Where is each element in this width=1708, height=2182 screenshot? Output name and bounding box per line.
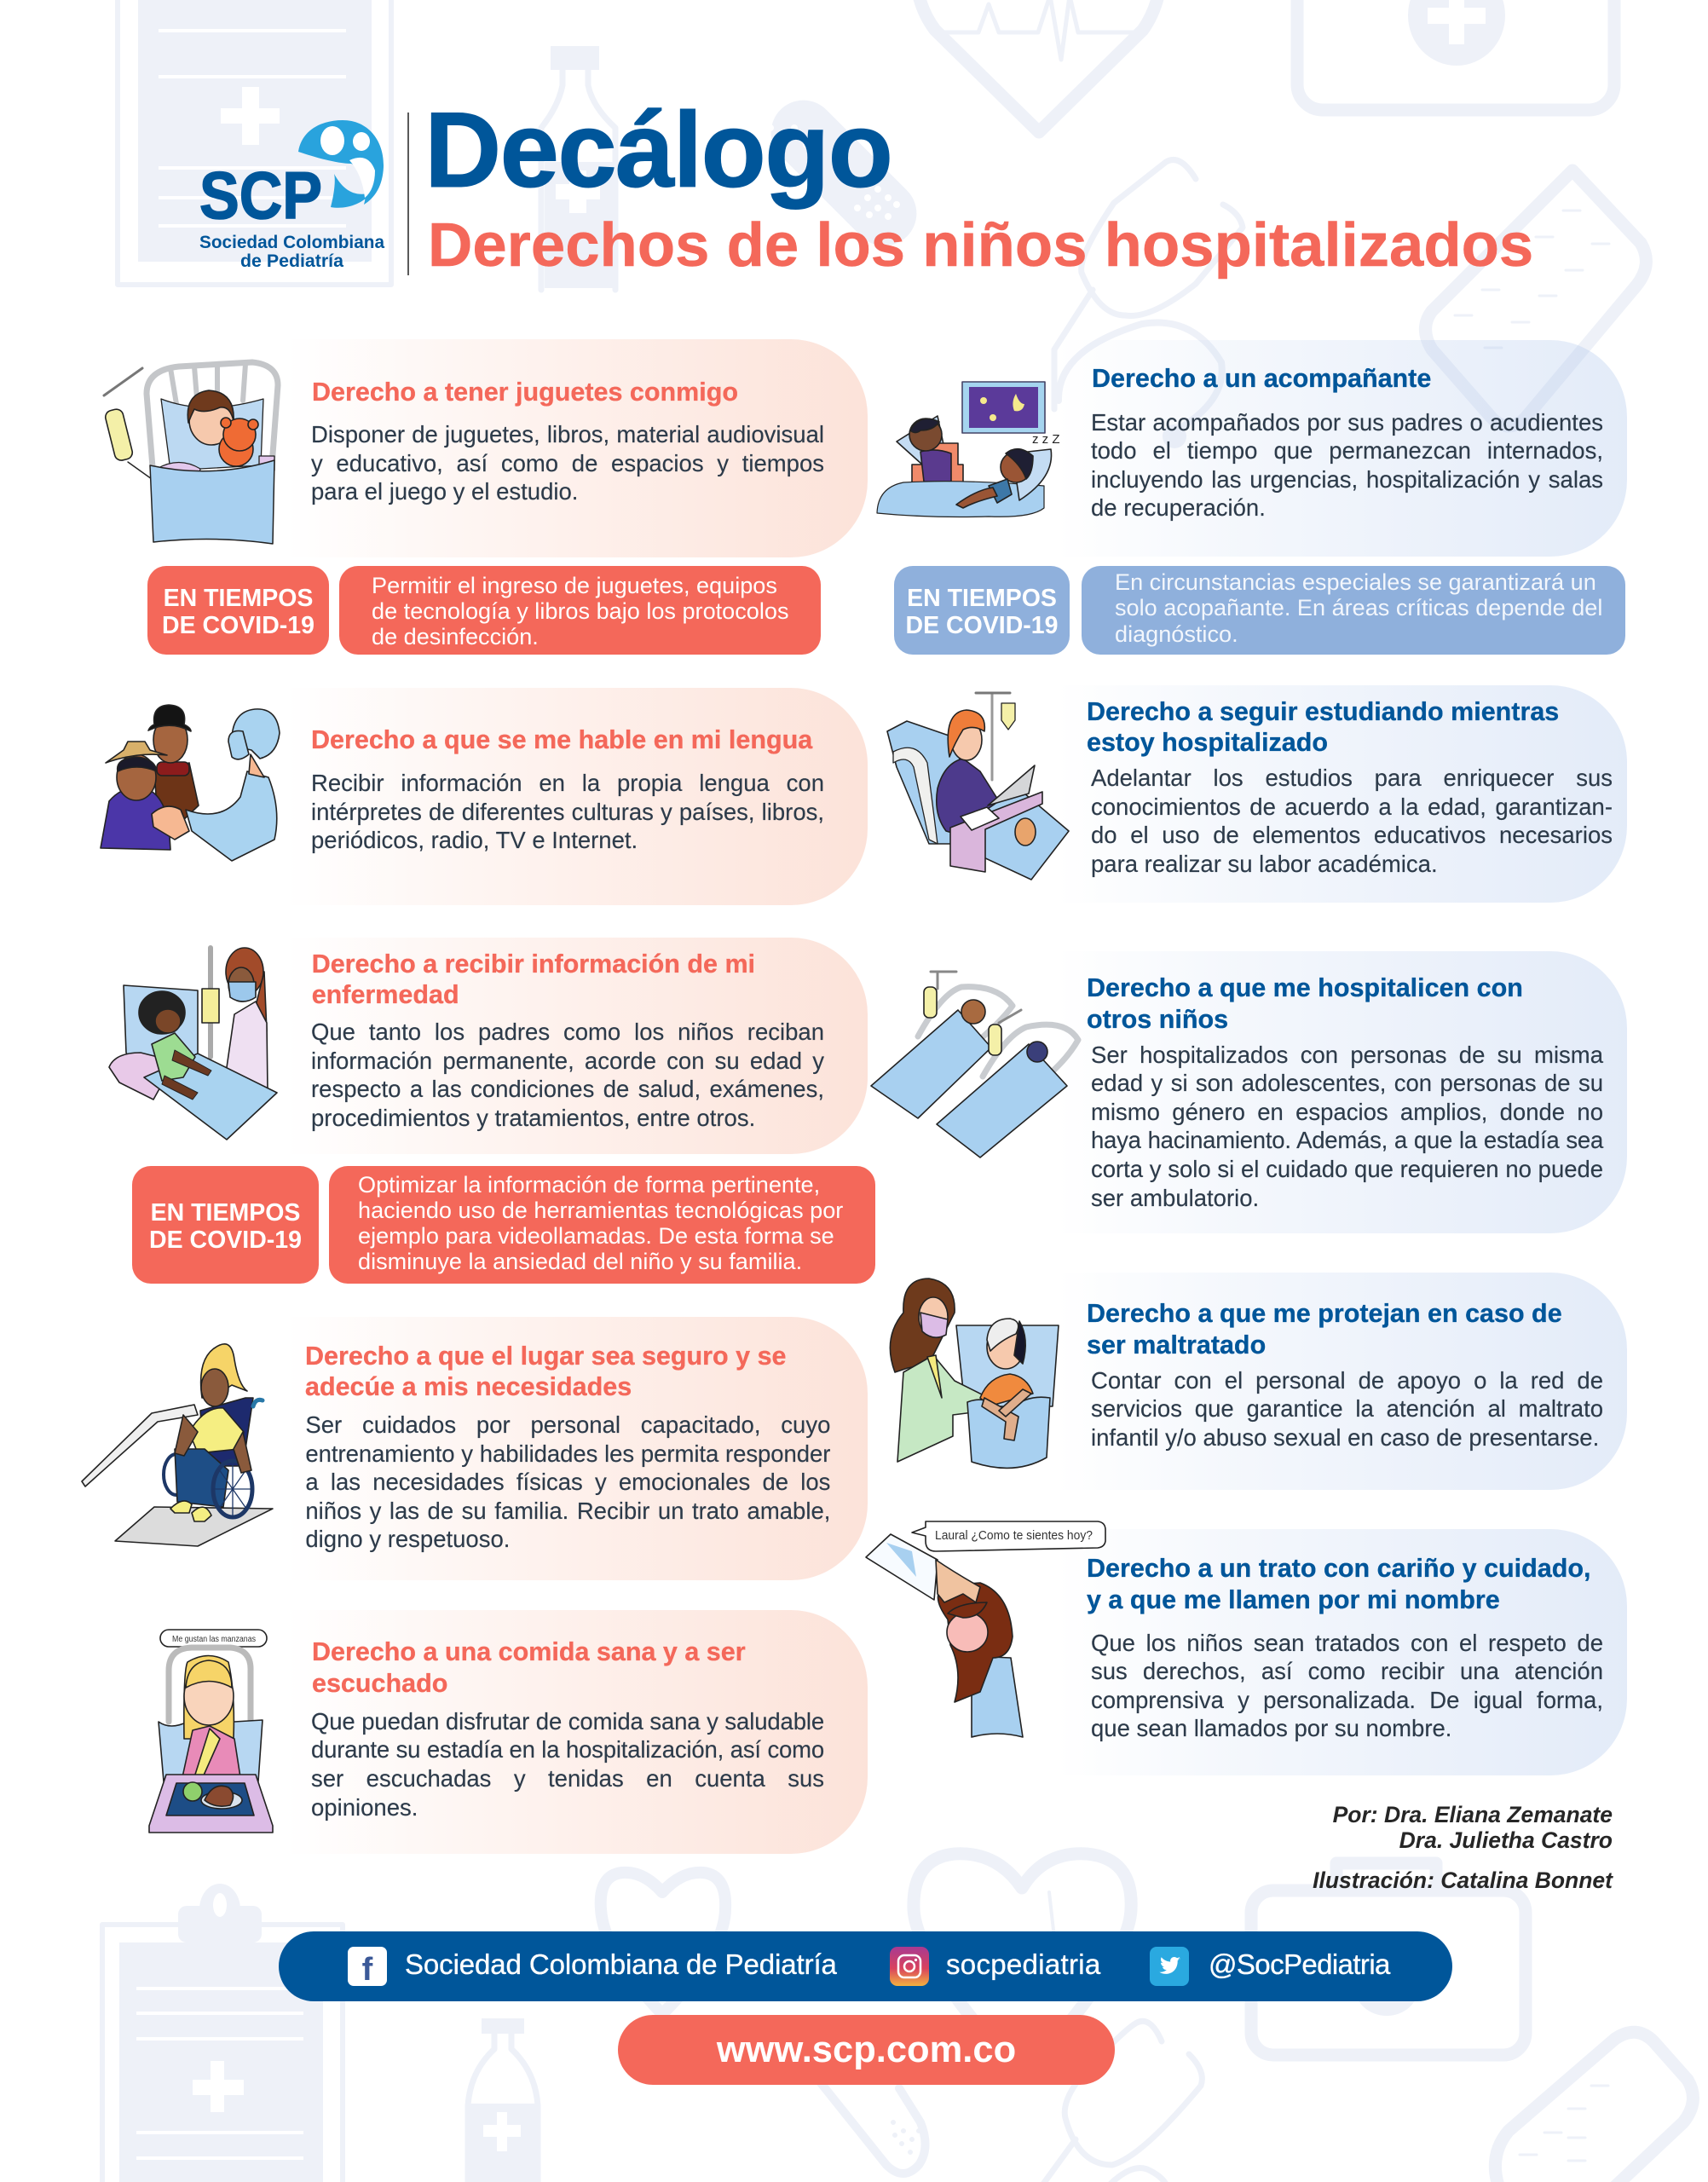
text bbox=[1091, 1367, 1603, 1451]
covid text: disminuye la ansiedad del niño y su familia. bbox=[358, 1248, 802, 1274]
text: a las necesidades físicas y emocionales de los bbox=[305, 1469, 830, 1495]
header divider bbox=[407, 113, 409, 275]
covid text: Optimizar la información de forma pertinente, bbox=[358, 1171, 820, 1197]
text bbox=[1091, 1042, 1604, 1211]
heading: Derecho a que se me hable en mi lengua bbox=[311, 725, 812, 754]
text: Adelantar los estudios para enriquecer sus bbox=[1091, 765, 1613, 791]
heading: Derecho a recibir información de mi bbox=[312, 950, 755, 978]
text: durante su estadía en la hospitalización, así como bbox=[311, 1736, 824, 1763]
panel: maltrato bbox=[1057, 1273, 1627, 1490]
credits: autoras: Dra. Julietha Castro bbox=[1399, 1827, 1613, 1853]
panel: estudiar bbox=[1057, 685, 1627, 903]
text: respecto a las condiciones de salud, exámenes, bbox=[311, 1076, 824, 1102]
text: servicios que garantice la atención al maltrato bbox=[1091, 1395, 1603, 1422]
text: Contar con el personal de apoyo o la red de bbox=[1091, 1367, 1603, 1394]
heading: enfermedad bbox=[312, 980, 459, 1009]
text: Que tanto los padres como los niños reciban bbox=[311, 1019, 824, 1045]
text: periódicos, radio, TV e Internet. bbox=[311, 827, 638, 853]
heading: Derecho a que el lugar sea seguro y se bbox=[305, 1342, 786, 1371]
panel: comida bbox=[286, 1610, 868, 1854]
panel: información bbox=[286, 938, 868, 1154]
text: haya hacinamiento. Además, a que la estadía sea bbox=[1091, 1127, 1603, 1153]
covid text bbox=[1115, 569, 1602, 647]
covid text bbox=[372, 571, 789, 649]
heading bbox=[1087, 1299, 1562, 1359]
text: para realizar su labor académica. bbox=[1091, 851, 1438, 877]
covid text: haciendo uso de herramientas tecnológicas por bbox=[358, 1197, 843, 1223]
text: todo el tiempo que permanezcan internados, bbox=[1091, 437, 1603, 464]
text bbox=[305, 1411, 830, 1553]
heading: Derecho a un trato con cariño y cuidado, bbox=[1087, 1554, 1590, 1583]
illustration: niña con bandeja de comida: Me gustan las manzanas bbox=[172, 1635, 256, 1644]
text bbox=[311, 1708, 824, 1821]
icon: facebook bbox=[348, 1947, 387, 1986]
heading: Derecho a tener juguetes conmigo bbox=[312, 378, 738, 407]
heading bbox=[312, 1637, 746, 1698]
covid label bbox=[894, 566, 1070, 655]
text: Ser hospitalizados con personas de su misma bbox=[1091, 1042, 1603, 1068]
icon: twitter bbox=[1150, 1947, 1189, 1986]
text: mismo género en espacios amplios, donde no bbox=[1091, 1099, 1603, 1125]
credits: ilustración: Ilustración: Catalina Bonnet bbox=[1313, 1867, 1613, 1893]
logo name: Sociedad Colombiana bbox=[199, 233, 384, 252]
social media bar bbox=[279, 1931, 1452, 2001]
text: digno y respetuoso. bbox=[305, 1526, 510, 1552]
covid label: EN TIEMPOS bbox=[164, 585, 313, 612]
text: infantil y/o abuso sexual en caso de presentarse. bbox=[1091, 1424, 1599, 1451]
heading: Derecho a que me hospitalicen con bbox=[1087, 973, 1523, 1002]
text: Que puedan disfrutar de comida sana y saludable bbox=[311, 1708, 824, 1735]
text: información permanente, acorde con su edad y bbox=[311, 1048, 824, 1074]
covid text: Permitir el ingreso de juguetes, equipos bbox=[372, 571, 777, 598]
twitter handle: @SocPediatria bbox=[1209, 1948, 1390, 1980]
speech bubble bbox=[912, 1521, 1105, 1551]
covid text: solo acopañante. En áreas críticas depende del bbox=[1115, 594, 1602, 621]
text bbox=[1091, 1630, 1603, 1742]
heading: ser maltratado bbox=[1087, 1331, 1266, 1359]
heading bbox=[1087, 1554, 1590, 1614]
logo: Sociedad Colombiana de Pediatría bbox=[199, 120, 385, 271]
credits: autoras bbox=[1333, 1802, 1613, 1853]
illustration: acompañante durmiendo bbox=[877, 382, 1060, 517]
website pill bbox=[618, 2015, 1115, 2085]
text: intérpretes de diferentes culturas y países, libros, bbox=[311, 799, 824, 825]
illustration: estudiando en la cama bbox=[887, 693, 1069, 880]
speech bubble bbox=[160, 1630, 267, 1647]
logo emblem bbox=[298, 120, 384, 208]
covid label bbox=[147, 566, 329, 655]
text: Recibir información en la propia lengua con bbox=[311, 770, 824, 796]
covid text: de tecnología y libros bajo los protocolos bbox=[372, 597, 789, 624]
text: ser escuchadas y tenidas en cuenta sus bbox=[311, 1765, 824, 1792]
text bbox=[311, 770, 824, 854]
text: opiniones. bbox=[311, 1794, 418, 1821]
text: Estar acompañados por sus padres o acudientes bbox=[1091, 409, 1603, 436]
covid label: DE COVID-19 bbox=[162, 612, 314, 639]
heading: adecúe a mis necesidades bbox=[305, 1372, 632, 1401]
covid note: juguetes bbox=[147, 566, 821, 655]
covid text box bbox=[339, 566, 821, 655]
illustration: niña en silla de ruedas bbox=[82, 1344, 273, 1546]
illustration: niña recibe información bbox=[109, 948, 277, 1140]
website url: www.scp.com.co bbox=[717, 2029, 1016, 2069]
illustration: niño con osito en cama bbox=[104, 362, 278, 544]
text bbox=[311, 421, 824, 505]
heading bbox=[1087, 697, 1559, 757]
zzz: z z Z bbox=[1032, 432, 1060, 447]
covid note: información bbox=[132, 1166, 875, 1284]
text: entrenamiento y habilidades les permita responder bbox=[305, 1440, 830, 1467]
panel: acompañante bbox=[1057, 340, 1627, 557]
text: sus derechos, así como recibir una atención bbox=[1091, 1658, 1603, 1684]
panel: lengua bbox=[286, 688, 868, 905]
title: Decálogo bbox=[424, 91, 892, 210]
text bbox=[1091, 409, 1603, 522]
text: conocimientos de acuerdo a la edad, garantizan- bbox=[1091, 794, 1613, 820]
text: procedimientos y tratamientos, entre otros. bbox=[311, 1105, 755, 1131]
heading: Derecho a una comida sana y a ser bbox=[312, 1637, 746, 1666]
text: Disponer de juguetes, libros, material audiovisual bbox=[311, 421, 824, 447]
covid text box bbox=[1082, 566, 1625, 655]
heading: estoy hospitalizado bbox=[1087, 728, 1328, 757]
heading: Derecho a que me protejan en caso de bbox=[1087, 1299, 1562, 1328]
text: corta y solo si el cuidado que requieren no puede bbox=[1091, 1156, 1603, 1182]
text: comprensiva y personalizada. De igual forma, bbox=[1091, 1687, 1603, 1713]
heading bbox=[1087, 973, 1523, 1034]
covid text: ejemplo para videollamadas. De esta forma se bbox=[358, 1222, 834, 1249]
illustration: niña con bandeja de comida bbox=[149, 1630, 273, 1833]
heading bbox=[305, 1342, 786, 1401]
covid note: acompañante bbox=[894, 566, 1625, 655]
heading: Derecho a seguir estudiando mientras bbox=[1087, 697, 1559, 726]
text: do el uso de elementos educativos necesarios bbox=[1091, 822, 1613, 848]
covid label: EN TIEMPOS bbox=[151, 1198, 300, 1226]
covid text bbox=[358, 1171, 843, 1274]
text: que sean llamados por su nombre. bbox=[1091, 1715, 1451, 1741]
text bbox=[1091, 765, 1613, 878]
covid label: DE COVID-19 bbox=[149, 1226, 302, 1253]
text: ser ambulatorio. bbox=[1091, 1185, 1259, 1211]
covid text: diagnóstico. bbox=[1115, 621, 1238, 647]
logo letters: SCP bbox=[199, 158, 322, 233]
text: de recuperación. bbox=[1091, 494, 1266, 521]
panel: otros niños bbox=[1057, 951, 1627, 1233]
subtitle: Derechos de los niños hospitalizados bbox=[428, 210, 1533, 280]
covid label: EN TIEMPOS bbox=[907, 585, 1057, 612]
panel: juguetes bbox=[286, 339, 868, 557]
credits: autoras: Por: Dra. Eliana Zemanate bbox=[1333, 1802, 1613, 1827]
illustration: niña con caricia en la cabeza bbox=[866, 1521, 1105, 1737]
text: para el juego y el estudio. bbox=[311, 478, 578, 505]
covid text: En circunstancias especiales se garantizará un bbox=[1115, 569, 1596, 595]
illustration: niña con caricia en la cabeza: Laural ¿Como te sientes hoy? bbox=[935, 1528, 1093, 1543]
facebook name: Sociedad Colombiana de Pediatría bbox=[405, 1948, 837, 1980]
logo name: de Pediatría bbox=[240, 251, 343, 271]
heading: escuchado bbox=[312, 1669, 447, 1698]
icon: instagram bbox=[890, 1947, 929, 1986]
text: y educativo, así como de espacios y tiempos bbox=[311, 450, 824, 476]
text bbox=[311, 1019, 824, 1132]
covid label: DE COVID-19 bbox=[906, 612, 1058, 639]
covid text box bbox=[329, 1166, 875, 1284]
panel: lugar seguro bbox=[286, 1317, 868, 1580]
illustration: dos camas bbox=[871, 972, 1078, 1157]
text: Que los niños sean tratados con el respeto de bbox=[1091, 1630, 1603, 1656]
covid label bbox=[132, 1166, 319, 1284]
illustration: paciente con intérprete bbox=[101, 705, 280, 861]
heading: y a que me llamen por mi nombre bbox=[1087, 1585, 1500, 1614]
text: Ser cuidados por personal capacitado, cuyo bbox=[305, 1411, 830, 1438]
heading bbox=[312, 950, 755, 1009]
text: incluyendo las urgencias, hospitalización y salas bbox=[1091, 466, 1603, 493]
illustration: doctora y niña con vendaje bbox=[890, 1279, 1059, 1468]
text: edad y si son adolescentes, con personas de su bbox=[1091, 1070, 1603, 1096]
panel: cariño bbox=[1057, 1529, 1627, 1775]
logo name bbox=[199, 233, 384, 271]
covid text: de desinfección. bbox=[372, 623, 539, 649]
instagram handle: socpediatria bbox=[946, 1948, 1101, 1980]
text: niños y las de su familia. Recibir un trato amable, bbox=[305, 1498, 830, 1524]
heading: Derecho a un acompañante bbox=[1092, 364, 1431, 393]
heading: otros niños bbox=[1087, 1005, 1228, 1034]
